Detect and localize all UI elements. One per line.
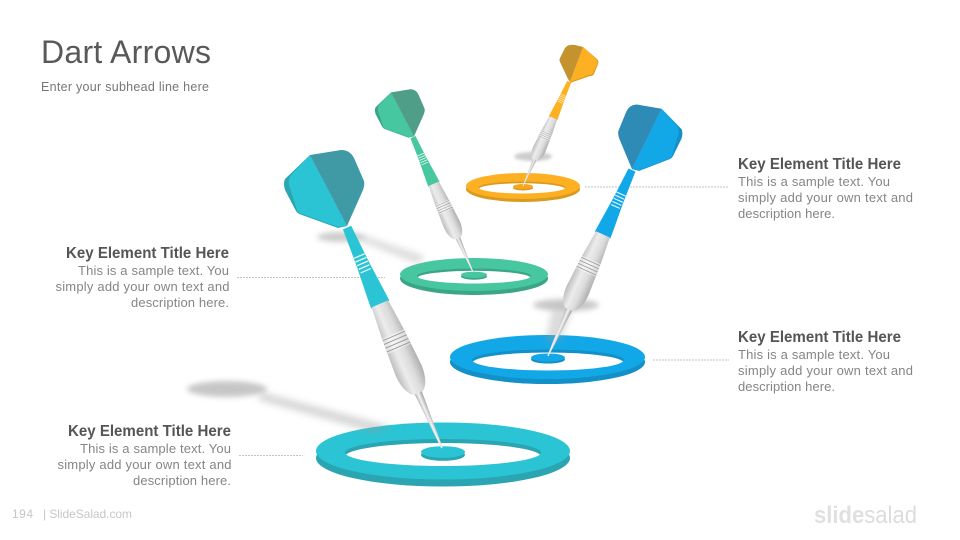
- text block: middle left: description here.: [131, 295, 229, 310]
- text block: top right: This is a sample text. You: [738, 174, 890, 189]
- text block: top right: Key Element Title Here: [738, 156, 901, 173]
- footer: page number and site: | SlideSalad.com: [43, 507, 132, 521]
- footer: page number and site: 194: [12, 507, 33, 521]
- dart: orange: [517, 45, 598, 189]
- text block: bottom left: simply add your own text and: [58, 457, 232, 472]
- text block: middle right: This is a sample text. You: [738, 347, 890, 362]
- target: orange ring: [466, 173, 580, 202]
- leader lines: [237, 187, 729, 456]
- text block: bottom left: [58, 423, 232, 488]
- text block: bottom left: Key Element Title Here: [68, 423, 231, 440]
- shadow: green dart: [317, 232, 425, 264]
- text block: middle right: Key Element Title Here: [738, 329, 901, 346]
- text block: middle left: This is a sample text. You: [78, 263, 229, 278]
- dart: green: [375, 89, 481, 276]
- text block: top right: description here.: [738, 206, 835, 221]
- logo wordmark: slidesalad: [814, 502, 917, 529]
- title: Dart Arrows: [41, 34, 211, 70]
- dart: teal: [284, 150, 455, 454]
- text block: top right: simply add your own text and: [738, 190, 913, 205]
- shadow: orange dart: [514, 152, 552, 161]
- subhead: Enter your subhead line here: [41, 80, 209, 94]
- text block: bottom left: This is a sample text. You: [80, 441, 231, 456]
- text block: middle left: Key Element Title Here: [66, 245, 229, 262]
- text block: top right: [738, 156, 913, 221]
- text block: middle right: description here.: [738, 379, 835, 394]
- target: teal ring: [316, 422, 570, 486]
- target: green ring: [400, 258, 548, 295]
- text block: middle right: [738, 329, 913, 394]
- dart: blue: [537, 105, 682, 361]
- text block: middle left: [56, 245, 230, 310]
- text block: middle right: simply add your own text and: [738, 363, 913, 378]
- target: blue ring: [450, 335, 645, 384]
- shadow: teal dart: [187, 381, 390, 433]
- text block: bottom left: description here.: [133, 473, 231, 488]
- shadow: blue dart: [533, 299, 599, 342]
- text block: middle left: simply add your own text and: [56, 279, 230, 294]
